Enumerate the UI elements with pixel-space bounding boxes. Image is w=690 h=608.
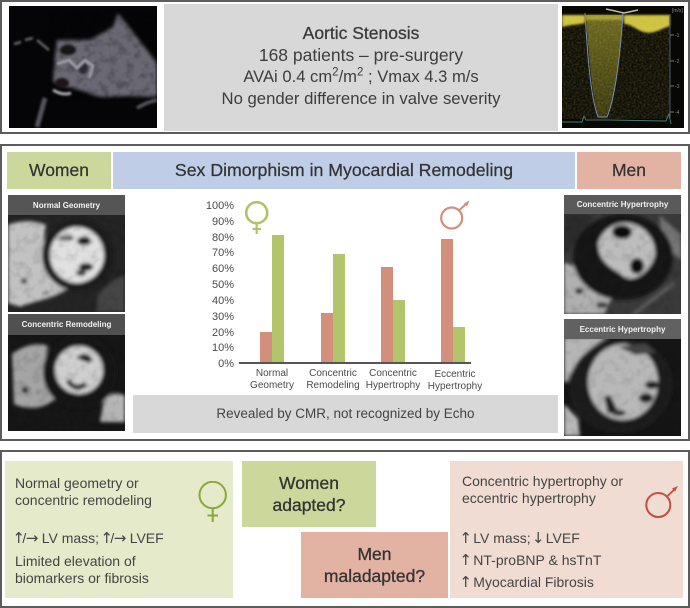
image: normal geometry MRI [8,195,125,312]
text: men fibrosis: ↑ Myocardial Fibrosis [459,573,594,591]
doppler image: -2 [675,59,680,65]
image: concentric remodeling MRI [8,314,125,431]
y axis labels: 30% [212,311,234,323]
text: men geometry [462,473,623,506]
panel: women findings [5,461,233,598]
x label: normal geometry: Geometry [250,380,294,391]
text: men biomarkers: ↑ NT-proBNP & hsTnT [459,551,601,569]
title: aortic stenosis: Aortic Stenosis [303,23,419,43]
text: women geometry [15,475,152,508]
heading: title: Sex Dimorphism in Myocardial Remodeling [175,160,513,180]
echocardiogram image [9,6,157,128]
label: eccentric hypertrophy: Eccentric Hypertrophy [580,325,665,334]
y axis labels: 40% [212,295,234,307]
y axis labels [206,200,234,370]
x label: eccentric hypertrophy [428,369,482,392]
label: concentric hypertrophy: Concentric Hypertrophy [577,200,668,209]
text: men LV mass: ↑ LV mass; ↓ LVEF [459,529,580,547]
y axis labels: 100% [206,200,234,212]
text: men geometry: eccentric hypertrophy [462,490,596,506]
bars: eccentric hypertrophy [441,239,465,362]
bar chart [206,200,482,392]
heading: women: Women [29,160,89,180]
text: AVAi and Vmax: AVAi 0.4 cm2/m2 ; Vmax 4.3 m/s [243,66,479,86]
x label: concentric remodeling: Remodeling [306,380,360,391]
icon: male symbol [645,486,678,518]
doppler image: -3 [675,84,680,90]
y axis labels: 20% [212,327,234,339]
text: gender: No gender difference in valve severity [222,89,500,108]
x label: concentric hypertrophy [366,368,420,391]
y axis labels: 50% [212,279,234,291]
doppler image [562,6,684,128]
doppler image: -1 [675,33,680,39]
text: women geometry: concentric remodeling [15,492,152,508]
text: men geometry: Concentric hypertrophy or [462,473,623,489]
text: patients: 168 patients – pre-surgery [259,45,463,65]
x label: normal geometry: Normal [256,368,288,379]
text: women biomarkers [15,553,149,586]
panel: sex dimorphism [0,144,690,441]
text: women LV mass: ↑/→ LV mass; ↑/→ LVEF [12,529,164,547]
x label: concentric hypertrophy: Concentric [369,368,417,379]
x label: normal geometry [250,368,294,391]
x label: concentric remodeling: Concentric [309,368,357,379]
panel: men findings [450,461,683,598]
callout: revealed by CMR [133,395,558,433]
bars: normal geometry [260,235,284,362]
callout: revealed by CMR: Revealed by CMR, not recognized by Echo [216,406,475,421]
label: concentric remodeling: Concentric Remodeling [22,320,111,329]
x label: eccentric hypertrophy: Hypertrophy [428,381,482,392]
callout: men maladapted [301,532,448,598]
panel: aortic stenosis [0,0,690,134]
icon: female symbol [198,481,227,522]
x label: concentric hypertrophy: Hypertrophy [366,380,420,391]
heading: men [577,152,681,189]
x axis line [239,362,471,364]
callout: women adapted: Women [279,473,339,493]
icon: female symbol [244,200,268,234]
y axis labels: 90% [212,216,234,228]
panel: conclusions [0,450,690,608]
y axis labels: 70% [212,247,234,259]
icon: male symbol [440,200,470,230]
y axis labels: 0% [218,358,234,370]
image: concentric hypertrophy MRI [564,195,681,314]
label: normal geometry: Normal Geometry [33,201,100,210]
text: women biomarkers: Limited elevation of [15,553,136,569]
y axis labels: 10% [212,342,234,354]
x label: eccentric hypertrophy: Eccentric [434,369,476,380]
callout: women adapted: adapted? [272,495,346,515]
bars: concentric hypertrophy [381,267,405,362]
heading: women [7,152,111,189]
bars: concentric remodeling [321,254,345,362]
doppler image: [m/s] [672,8,683,14]
heading: title [113,152,575,189]
doppler image: -4 [675,110,680,116]
callout: women adapted [242,461,376,527]
image: eccentric hypertrophy MRI [564,319,681,436]
heading: men: Men [612,160,646,180]
callout: men maladapted: Men [357,544,392,564]
callout: men maladapted: maladapted? [324,566,425,586]
text: women biomarkers: biomarkers or fibrosis [15,570,149,586]
x label: concentric remodeling [306,368,360,391]
text: women geometry: Normal geometry or [15,475,139,491]
summary box [164,4,558,131]
y axis labels: 80% [212,232,234,244]
y axis labels: 60% [212,263,234,275]
